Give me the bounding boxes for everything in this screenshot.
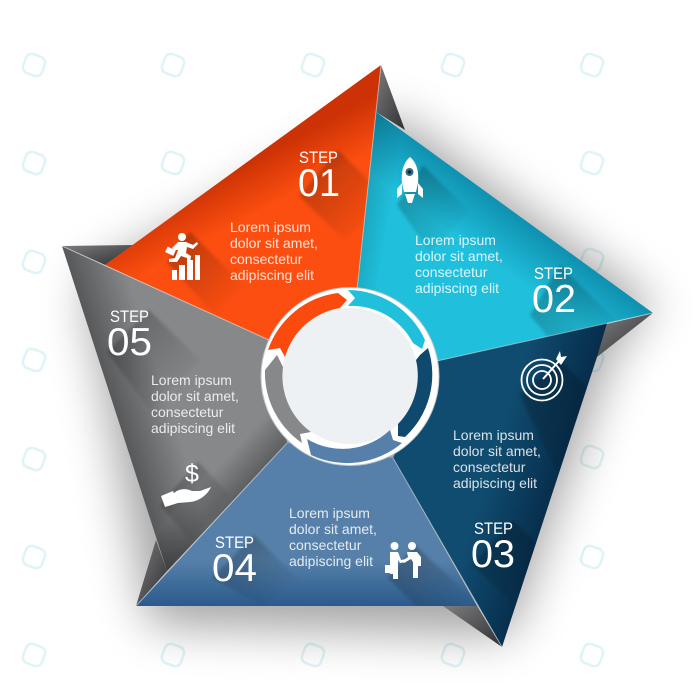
step 04 text: Lorem ipsum — [289, 505, 370, 521]
step 05 text: adipiscing elit — [151, 420, 235, 436]
step 01 text: Lorem ipsum — [230, 219, 311, 235]
step 03 text: adipiscing elit — [453, 475, 537, 491]
panel: step 01 — [105, 65, 385, 340]
long shadows — [108, 310, 222, 529]
step 04 text: consectetur — [289, 537, 362, 553]
long shadows — [396, 165, 612, 336]
step 05 text: Lorem ipsum — [151, 372, 232, 388]
ring arrow: steel — [307, 430, 402, 463]
panel: step 05 — [62, 246, 287, 571]
step 02 text: Lorem ipsum — [415, 232, 496, 248]
icon: handshake — [385, 542, 421, 579]
icon: target — [522, 351, 567, 400]
step 03 label: STEP — [474, 520, 513, 538]
step 01 text: consectetur — [230, 251, 303, 267]
step 04 text: dolor sit amet, — [289, 521, 377, 537]
ring arrow: teal — [348, 290, 425, 349]
panel: step 03: 03 — [471, 533, 515, 576]
panel: step 02 — [357, 112, 653, 370]
step 04 label: STEP — [215, 534, 254, 552]
drop shadow of pentagon — [85, 115, 655, 635]
central ring — [261, 288, 439, 466]
icon: rocket — [397, 157, 423, 203]
ring arrow: navy — [398, 348, 432, 437]
panel: step 05: 05 — [107, 321, 152, 364]
ring base — [261, 288, 439, 466]
long shadows — [472, 362, 586, 590]
icon: runner and bars — [165, 233, 200, 280]
panel: step 04 — [136, 443, 480, 620]
long shadows — [166, 150, 368, 308]
step 05 text: consectetur — [151, 404, 224, 420]
inner disc — [282, 308, 418, 444]
icon: dollar in hand: $ — [185, 460, 199, 488]
long shadows — [212, 535, 458, 606]
step 01 text: dolor sit amet, — [230, 235, 318, 251]
folded corners — [62, 65, 653, 647]
step 05 text: dolor sit amet, — [151, 388, 239, 404]
panel: step 04: 04 — [212, 547, 257, 590]
step 03 text: consectetur — [453, 459, 526, 475]
panel: step 03 — [393, 323, 625, 647]
step 02 text: dolor sit amet, — [415, 248, 503, 264]
step 01 label: STEP — [299, 149, 338, 167]
step 02 label: STEP — [534, 265, 573, 283]
watermark pattern — [21, 52, 605, 668]
panel: step 02: 02 — [532, 278, 576, 321]
ring arrow: gray — [265, 355, 311, 443]
step 03 text: dolor sit amet, — [453, 443, 541, 459]
ring arrow: orange — [268, 293, 347, 357]
icon: dollar in hand — [161, 460, 211, 507]
step 02 text: consectetur — [415, 264, 488, 280]
step 01 text: adipiscing elit — [230, 267, 314, 283]
step 03 text: Lorem ipsum — [453, 427, 534, 443]
step 05 label: STEP — [110, 308, 149, 326]
step 04 text: adipiscing elit — [289, 553, 373, 569]
step 02 text: adipiscing elit — [415, 280, 499, 296]
panel: step 01: 01 — [298, 162, 340, 205]
